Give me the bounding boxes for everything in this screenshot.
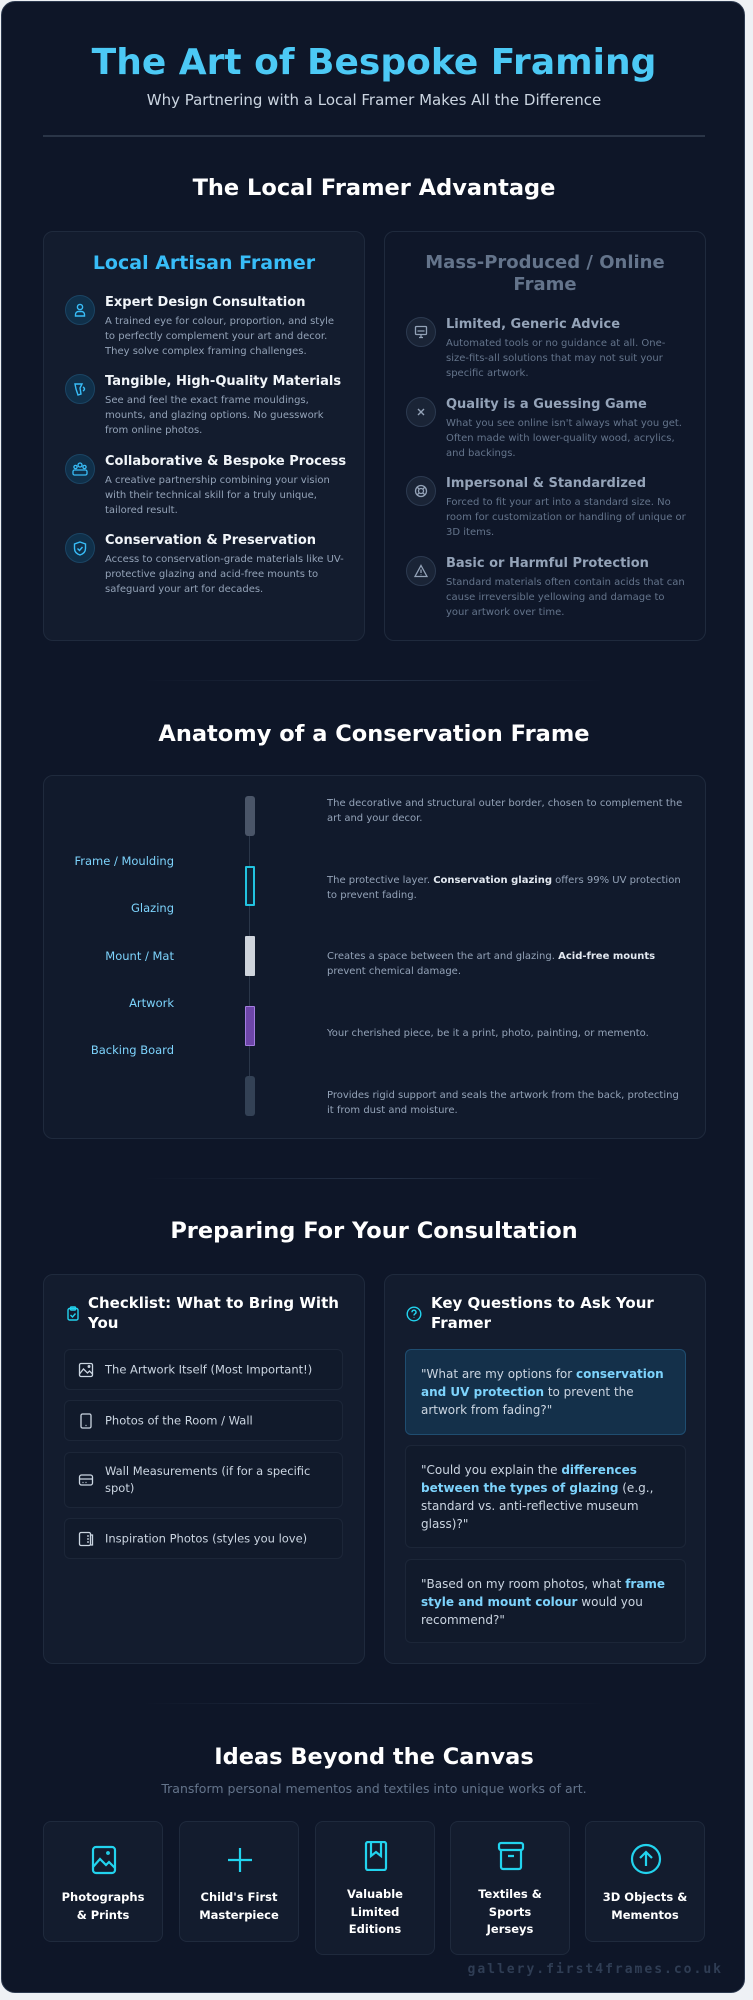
item: limited advice <box>446 317 665 379</box>
checklist item: inspiration: Inspiration Photos (styles you love) <box>105 1531 307 1545</box>
icon: shield <box>65 533 95 563</box>
checklist item: measurements <box>64 1452 343 1508</box>
panel: checklist <box>43 1274 365 1664</box>
panel: local artisan framer <box>43 231 365 641</box>
item: collaborative: Collaborative & Bespoke Process <box>105 454 346 469</box>
heading: ideas: Ideas Beyond the Canvas <box>214 1744 534 1770</box>
tile: photographs <box>43 1821 163 1942</box>
subtitle: Why Partnering with a Local Framer Makes All the Difference <box>147 91 601 109</box>
item: impersonal: Forced to fit your art into a standard size. No room for customization or handling of unique or 3D items. <box>446 497 686 538</box>
question 2 <box>405 1445 686 1548</box>
ideas subtitle: Transform personal mementos and textiles into unique works of art. <box>161 1781 587 1796</box>
panel: mass-produced frame <box>384 231 706 641</box>
tile: textiles: Sports <box>489 1904 531 1918</box>
item: conservation <box>105 533 344 595</box>
panel: key questions <box>384 1274 706 1664</box>
heading: local framer advantage: The Local Framer Advantage <box>193 175 555 201</box>
item: collaborative <box>105 454 346 516</box>
icon: monitor <box>406 317 436 347</box>
item: expert design: Expert Design Consultation <box>105 295 305 310</box>
icon: materials <box>65 374 95 404</box>
text: Backing Board <box>91 1043 174 1057</box>
questions heading: Key Questions to Ask Your Framer <box>431 1294 654 1332</box>
tile: 3d objects <box>585 1821 705 1942</box>
text: Frame / Moulding <box>74 854 174 868</box>
tile: 3d objects: 3D Objects & <box>603 1890 687 1904</box>
tile: child's first masterpiece: Masterpiece <box>199 1908 279 1922</box>
card title: Mass-Produced / Online <box>425 252 665 273</box>
item: collaborative: A creative partnership combining your vision with their technical skill for a truly unique, tailored result. <box>105 475 330 516</box>
item: guessing game <box>446 397 682 459</box>
question 3: "Based on my room photos, what frame style and mount colour would you recommend?" <box>421 1577 665 1627</box>
text: Mount / Mat <box>105 949 174 963</box>
text: Your cherished piece, be it a print, photo, painting, or memento. <box>327 1028 649 1039</box>
tile: textiles: Jerseys <box>487 1922 533 1936</box>
question 1 <box>405 1349 686 1435</box>
icon: lifebuoy <box>406 476 436 506</box>
checklist heading: Checklist: What to Bring With You <box>88 1294 339 1332</box>
tile: limited editions: Limited <box>351 1904 399 1918</box>
text: The protective layer. Conservation glazing offers 99% UV protection to prevent fading. <box>327 875 681 901</box>
tile: limited editions: Editions <box>349 1922 401 1936</box>
panel: anatomy diagram <box>43 775 706 1139</box>
icon: x <box>406 397 436 427</box>
tile: photographs: & Prints <box>77 1908 129 1922</box>
card title: Local Artisan Framer <box>93 252 315 274</box>
checklist item: photos <box>64 1400 343 1441</box>
item: impersonal <box>446 476 686 538</box>
footer url: gallery.first4frames.co.uk <box>468 1962 723 1977</box>
tile: child's first masterpiece: Child's First <box>201 1890 277 1904</box>
item: impersonal: Impersonal & Standardized <box>446 476 646 491</box>
icon: people <box>65 454 95 484</box>
item: harmful protection: Standard materials often contain acids that can cause irreversible yellowing and damage to your artwork over time. <box>446 577 685 618</box>
card title <box>425 252 665 295</box>
text: Creates a space between the art and glazing. Acid-free mounts prevent chemical damage. <box>327 951 655 977</box>
item: harmful protection <box>446 556 685 618</box>
layer stack diagram <box>245 796 255 1116</box>
card title: Frame <box>513 274 577 295</box>
item: conservation: Access to conservation-grade materials like UV-protective glazing and acid-free mounts to safeguard your art for decades. <box>105 554 344 595</box>
question 3 <box>405 1559 686 1643</box>
text: Artwork <box>129 996 174 1010</box>
tile: limited editions <box>315 1821 435 1955</box>
tile: 3d objects: Mementos <box>611 1908 679 1922</box>
checklist item: artwork <box>64 1349 343 1390</box>
icon: warning <box>406 556 436 586</box>
tile: limited editions: Valuable <box>347 1887 403 1901</box>
question 2: "Could you explain the differences between the types of glazing (e.g., standard vs. anti-reflective museum glass)?" <box>421 1463 653 1531</box>
item: guessing game: Quality is a Guessing Game <box>446 397 647 412</box>
item: harmful protection: Basic or Harmful Protection <box>446 556 649 571</box>
question 1: "What are my options for conservation and UV protection to prevent the artwork from fading?" <box>421 1367 664 1417</box>
checklist item: inspiration <box>64 1518 343 1559</box>
checklist item: measurements: Wall Measurements (if for a specific spot) <box>105 1464 310 1495</box>
layer labels <box>74 854 174 1057</box>
heading: anatomy: Anatomy of a Conservation Frame <box>158 721 590 747</box>
text: The decorative and structural outer border, chosen to complement the art and your decor. <box>327 798 682 824</box>
checklist item: photos: Photos of the Room / Wall <box>105 1413 253 1427</box>
text: Provides rigid support and seals the artwork from the back, protecting it from dust and moisture. <box>327 1090 679 1116</box>
tile: textiles: Textiles & <box>478 1887 542 1901</box>
heading: preparing: Preparing For Your Consultation <box>170 1218 578 1244</box>
item: materials <box>105 374 341 436</box>
item: expert design: A trained eye for colour, proportion, and style to perfectly complement your art and decor. They solve complex framing challenges. <box>105 316 334 357</box>
tile: child's first masterpiece <box>179 1821 299 1942</box>
title: The Art of Bespoke Framing <box>92 42 656 83</box>
tile: textiles <box>450 1821 570 1955</box>
layer descriptions <box>326 798 682 1116</box>
item: conservation: Conservation & Preservation <box>105 533 316 548</box>
item: materials: Tangible, High-Quality Materials <box>105 374 341 389</box>
item: expert design <box>104 295 334 357</box>
item: limited advice: Automated tools or no guidance at all. One-size-fits-all solutions that may not suit your specific artwork. <box>446 338 665 379</box>
item: guessing game: What you see online isn't always what you get. Often made with lower-quality wood, acrylics, and backings. <box>446 418 682 459</box>
item: materials: See and feel the exact frame mouldings, mounts, and glazing options. No guesswork from online photos. <box>105 395 324 436</box>
checklist item: artwork: The Artwork Itself (Most Important!) <box>105 1362 312 1376</box>
text: Glazing <box>131 901 174 915</box>
tile: photographs: Photographs <box>62 1890 144 1904</box>
item: limited advice: Limited, Generic Advice <box>446 317 620 332</box>
icon: person <box>65 295 95 325</box>
